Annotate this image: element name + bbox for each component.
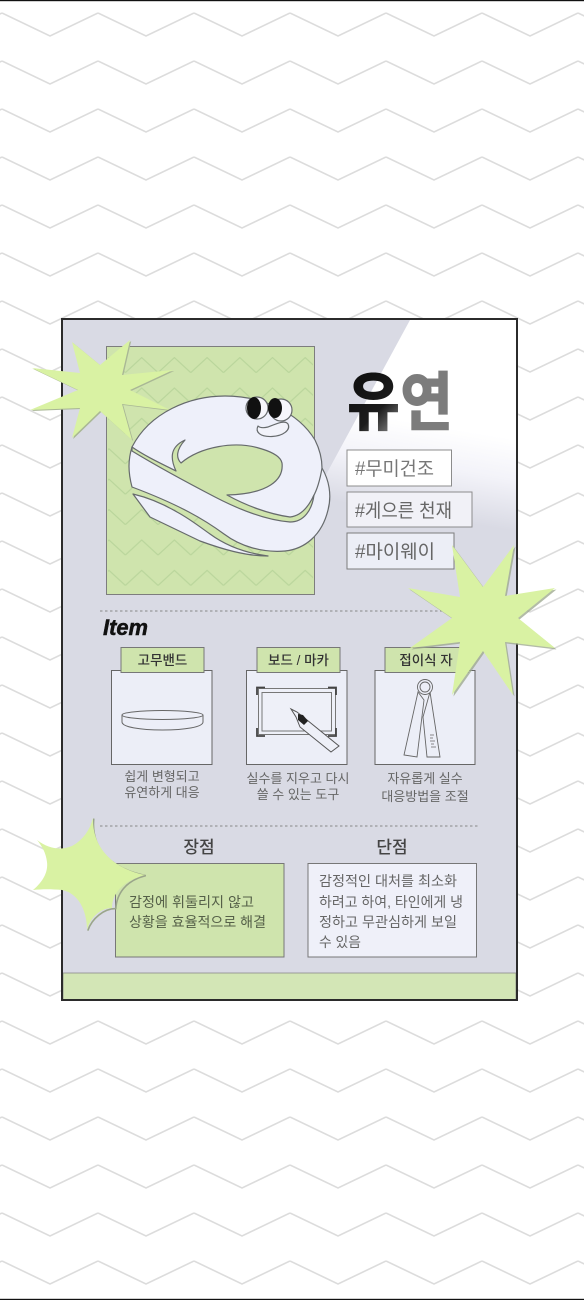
caption: board and marker: 실수를 지우고 다시	[247, 771, 349, 786]
caption: board and marker	[247, 771, 349, 802]
heading: Item: Item	[103, 615, 148, 640]
panel: 단점 box: 정하고 무관심하게 보일	[319, 914, 457, 930]
icon: folding ruler	[404, 680, 440, 757]
tag: 게으른 천재: #게으른 천재	[355, 500, 452, 522]
tag: 게으른 천재	[347, 492, 472, 527]
tag: 무미건조: #무미건조	[355, 458, 434, 480]
label: 접이식 자: 접이식 자	[399, 653, 453, 668]
item card: folding ruler	[375, 648, 475, 764]
panel: 장점 box: 상황을 효율적으로 해결	[129, 914, 266, 930]
caption: rubber band	[124, 769, 200, 800]
icon: character eyes	[246, 397, 292, 421]
caption: folding ruler: 대응방법을 조절	[381, 789, 469, 804]
panel: character image frame	[106, 346, 314, 594]
caption: rubber band: 유연하게 대응	[124, 785, 200, 800]
label: 보드 / 마카: 보드 / 마카	[268, 653, 330, 668]
panel: 단점 box: 수 있음	[319, 934, 361, 950]
panel: 장점 box: 감정에 휘둘리지 않고	[129, 894, 254, 910]
icon: green star left	[33, 818, 146, 931]
caption: board and marker: 쓸 수 있는 도구	[257, 787, 339, 802]
title: 유연	[347, 367, 453, 439]
tag: 마이웨이	[347, 533, 454, 569]
icon: green star top left	[30, 340, 174, 441]
icon: board and marker	[257, 688, 339, 752]
icon: rubber band character	[129, 396, 330, 556]
tag: 무미건조	[347, 450, 452, 486]
icon: rubber band	[122, 710, 203, 730]
caption: folding ruler	[381, 771, 469, 804]
icon: character mouth	[257, 422, 289, 437]
panel: 장점 box	[116, 864, 284, 957]
panel: bottom green band	[63, 973, 516, 1000]
icon: green star right	[408, 545, 556, 696]
tag: 마이웨이: #마이웨이	[355, 541, 435, 563]
panel: character card	[62, 319, 517, 1000]
panel: 단점 box	[308, 864, 476, 957]
caption: rubber band: 쉽게 변형되고	[124, 769, 200, 784]
label: 고무밴드: 고무밴드	[138, 653, 187, 668]
heading: 단점: 단점	[376, 838, 408, 857]
heading: 장점: 장점	[183, 838, 215, 857]
panel: 단점 box: 하려고 하여, 타인에게 냉	[319, 894, 463, 910]
item card: board and marker	[246, 648, 347, 764]
caption: folding ruler: 자유롭게 실수	[387, 771, 463, 786]
item card: rubber band	[112, 648, 212, 764]
panel: 단점 box: 감정적인 대처를 최소화	[319, 873, 457, 889]
